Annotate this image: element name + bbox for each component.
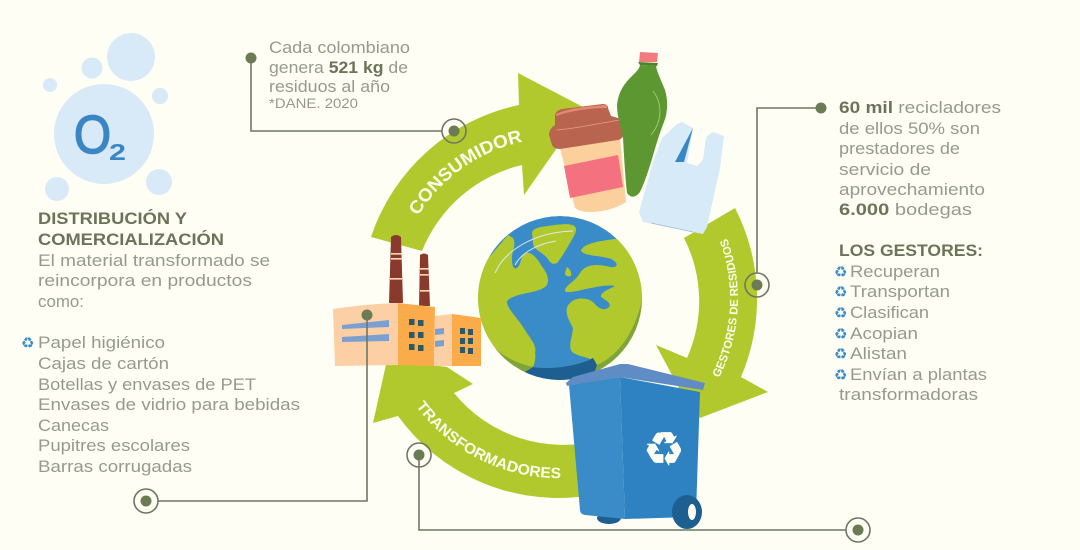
- arrow: transformadores: TRANSFORMADORES: [418, 400, 560, 478]
- text block: recicladores: prestadores de: [839, 140, 960, 158]
- text block: cada colombiano: genera 521 kg de: [269, 59, 408, 77]
- icon: earth globe: [478, 216, 642, 380]
- text block: introducción: El material transformado se: [38, 252, 270, 270]
- list: acciones: transformadoras: [839, 386, 978, 404]
- list: productos: Envases de vidrio para bebidas: [38, 396, 300, 414]
- icon: oxygen bubbles: 2: [109, 139, 126, 165]
- land: north island: [532, 224, 576, 264]
- text block: recicladores: servicio de: [839, 161, 931, 179]
- text block: introducción: como:: [38, 293, 84, 311]
- text block: recicladores: 6.000 bodegas: [839, 201, 972, 219]
- icon: oxygen bubbles: [43, 33, 172, 201]
- land: east: [565, 239, 650, 365]
- arrow: gestores de residuos: [656, 208, 768, 418]
- connector: transformadores: [407, 443, 870, 542]
- arrow: transformadores: [373, 365, 579, 498]
- icon: plastic bag: [639, 122, 724, 234]
- list: productos: Canecas: [38, 417, 109, 435]
- connector: consumidor: [246, 52, 466, 143]
- text block: introducción: [38, 252, 270, 311]
- panel: los gestores: [834, 242, 987, 404]
- list: acciones: ♻: [834, 345, 847, 363]
- arrow: consumidor: [371, 73, 582, 251]
- arrow: gestores de residuos: GESTORES DE RESIDUOS: [713, 239, 738, 376]
- list: acciones: Clasifican: [850, 304, 929, 322]
- list: acciones: [834, 263, 987, 404]
- list: productos: Cajas de cartón: [38, 355, 169, 373]
- panel: distribución y comercialización: [21, 209, 300, 476]
- arrow: consumidor: CONSUMIDOR: [410, 130, 522, 214]
- heading: los gestores: LOS GESTORES:: [839, 242, 983, 260]
- text block: recicladores: aprovechamiento: [839, 181, 985, 199]
- list: productos: Barras corrugadas: [38, 458, 192, 476]
- list: productos: Papel higiénico: [38, 334, 165, 352]
- heading: distribución: DISTRIBUCIÓN Y: [38, 209, 187, 228]
- list: productos: [21, 334, 300, 476]
- connector: gestores: [745, 102, 826, 297]
- text block: introducción: reincorpora en productos: [38, 272, 252, 290]
- list: acciones: Envían a plantas: [850, 366, 987, 384]
- list: acciones: ♻: [834, 325, 847, 343]
- list: acciones: Alistan: [850, 345, 907, 363]
- list: productos: ♻: [21, 334, 34, 352]
- land: west: [478, 235, 548, 372]
- shade: dark ocean: [525, 358, 597, 380]
- text block: cada colombiano: *DANE. 2020: [269, 95, 358, 111]
- shade: lower rim: [495, 300, 642, 380]
- list: acciones: ♻: [834, 366, 847, 384]
- text block: recicladores: [839, 99, 1001, 219]
- icon: recycling bin: [566, 364, 705, 529]
- text block: cada colombiano: [269, 39, 410, 111]
- text block: cada colombiano: residuos al año: [269, 78, 390, 96]
- land: small island: [565, 267, 571, 276]
- text block: recicladores: 60 mil recicladores: [839, 99, 1001, 117]
- list: acciones: Recuperan: [850, 263, 940, 281]
- list: acciones: Transportan: [850, 283, 950, 301]
- icon: factory: [333, 235, 481, 366]
- icon: coffee cup: [549, 104, 626, 212]
- icon: green bottle: [617, 52, 667, 197]
- text block: recicladores: de ellos 50% son: [839, 120, 980, 138]
- icon: oxygen bubbles: O: [74, 105, 111, 165]
- icon: recycling bin: ♻: [643, 422, 685, 476]
- list: acciones: ♻: [834, 304, 847, 322]
- list: productos: Pupitres escolares: [38, 437, 190, 455]
- list: acciones: Acopian: [850, 325, 918, 343]
- list: acciones: ♻: [834, 283, 847, 301]
- list: productos: Botellas y envases de PET: [38, 376, 256, 394]
- heading: comercialización: COMERCIALIZACIÓN: [38, 230, 224, 249]
- text block: cada colombiano: Cada colombiano: [269, 39, 410, 57]
- list: acciones: ♻: [834, 263, 847, 281]
- connector: distribución: [134, 310, 372, 513]
